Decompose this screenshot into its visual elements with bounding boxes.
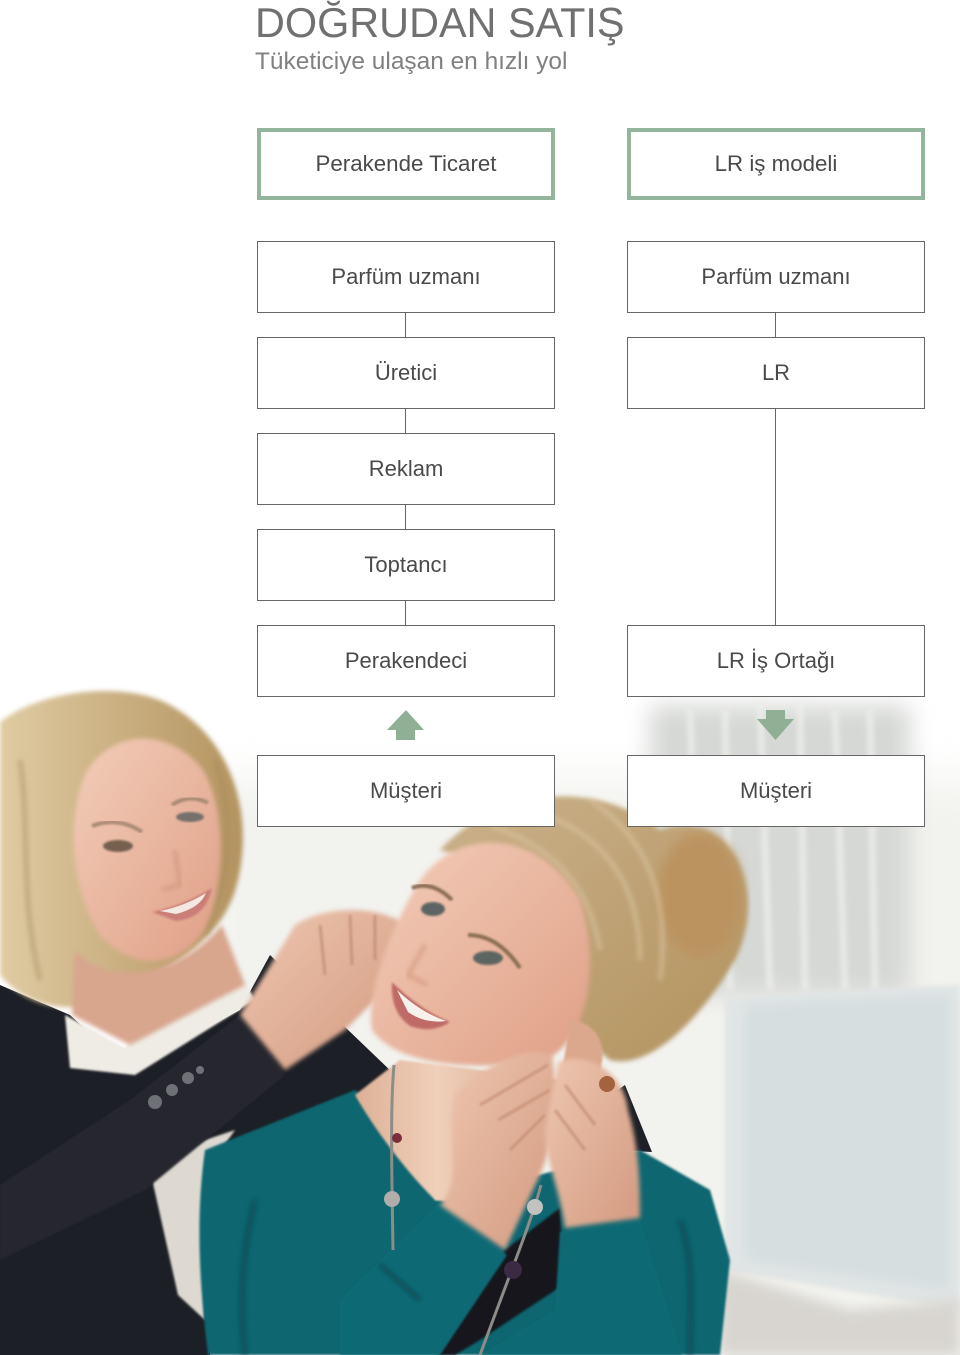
necklace xyxy=(392,1065,541,1355)
arrow: down xyxy=(757,710,794,740)
black inner top xyxy=(438,1208,563,1355)
box: perfume expert right xyxy=(627,241,925,313)
right connector line xyxy=(775,312,776,626)
box: customer left: Müşteri xyxy=(370,778,442,803)
jacket buttons xyxy=(148,1066,204,1109)
title: DOĞRUDAN SATIŞ xyxy=(255,0,624,46)
heading box: retail xyxy=(257,128,555,200)
box: customer right xyxy=(627,755,925,827)
left connector line xyxy=(405,312,406,626)
box: perfume expert right: Parfüm uzmanı xyxy=(701,264,851,289)
box: advertising: Reklam xyxy=(369,456,443,481)
sweater body xyxy=(199,1090,730,1355)
heading box: LR business model: LR iş modeli xyxy=(715,151,837,176)
neck and chest xyxy=(355,1060,560,1210)
box: LR: LR xyxy=(762,360,790,385)
heading box: retail: Perakende Ticaret xyxy=(316,151,496,176)
room background xyxy=(200,700,960,1355)
box: perfume expert left: Parfüm uzmanı xyxy=(331,264,481,289)
box: wholesaler xyxy=(257,529,555,601)
box: wholesaler: Toptancı xyxy=(364,552,448,577)
box: LR business partner xyxy=(627,625,925,697)
right sleeve xyxy=(480,1220,682,1355)
box: perfume expert left xyxy=(257,241,555,313)
ring xyxy=(599,1076,615,1092)
left woman xyxy=(0,691,405,1355)
face xyxy=(371,843,590,1066)
blouse xyxy=(150,1130,235,1320)
left sleeve xyxy=(340,1202,507,1355)
jacket xyxy=(0,955,395,1355)
box: LR business partner: LR İş Ortağı xyxy=(717,648,835,673)
box: retailer: Perakendeci xyxy=(345,648,467,673)
sleeve xyxy=(0,1015,285,1260)
box: producer: Üretici xyxy=(375,360,437,385)
left hand xyxy=(440,1052,555,1250)
box: customer left xyxy=(257,755,555,827)
box: LR xyxy=(627,337,925,409)
right hand xyxy=(545,1059,640,1228)
arrow: up xyxy=(387,710,424,740)
right woman xyxy=(199,796,748,1355)
subtitle: Tüketiciye ulaşan en hızlı yol xyxy=(255,48,567,75)
hair xyxy=(0,691,243,1007)
box: advertising xyxy=(257,433,555,505)
hand and forearm xyxy=(240,910,405,1070)
face xyxy=(74,739,221,961)
neck xyxy=(72,925,245,1045)
box: retailer xyxy=(257,625,555,697)
box: customer right: Müşteri xyxy=(740,778,812,803)
ear xyxy=(560,1020,603,1085)
heading box: LR business model xyxy=(627,128,925,200)
box: producer xyxy=(257,337,555,409)
hair xyxy=(440,796,748,1061)
dark jacket behind xyxy=(610,1085,652,1152)
